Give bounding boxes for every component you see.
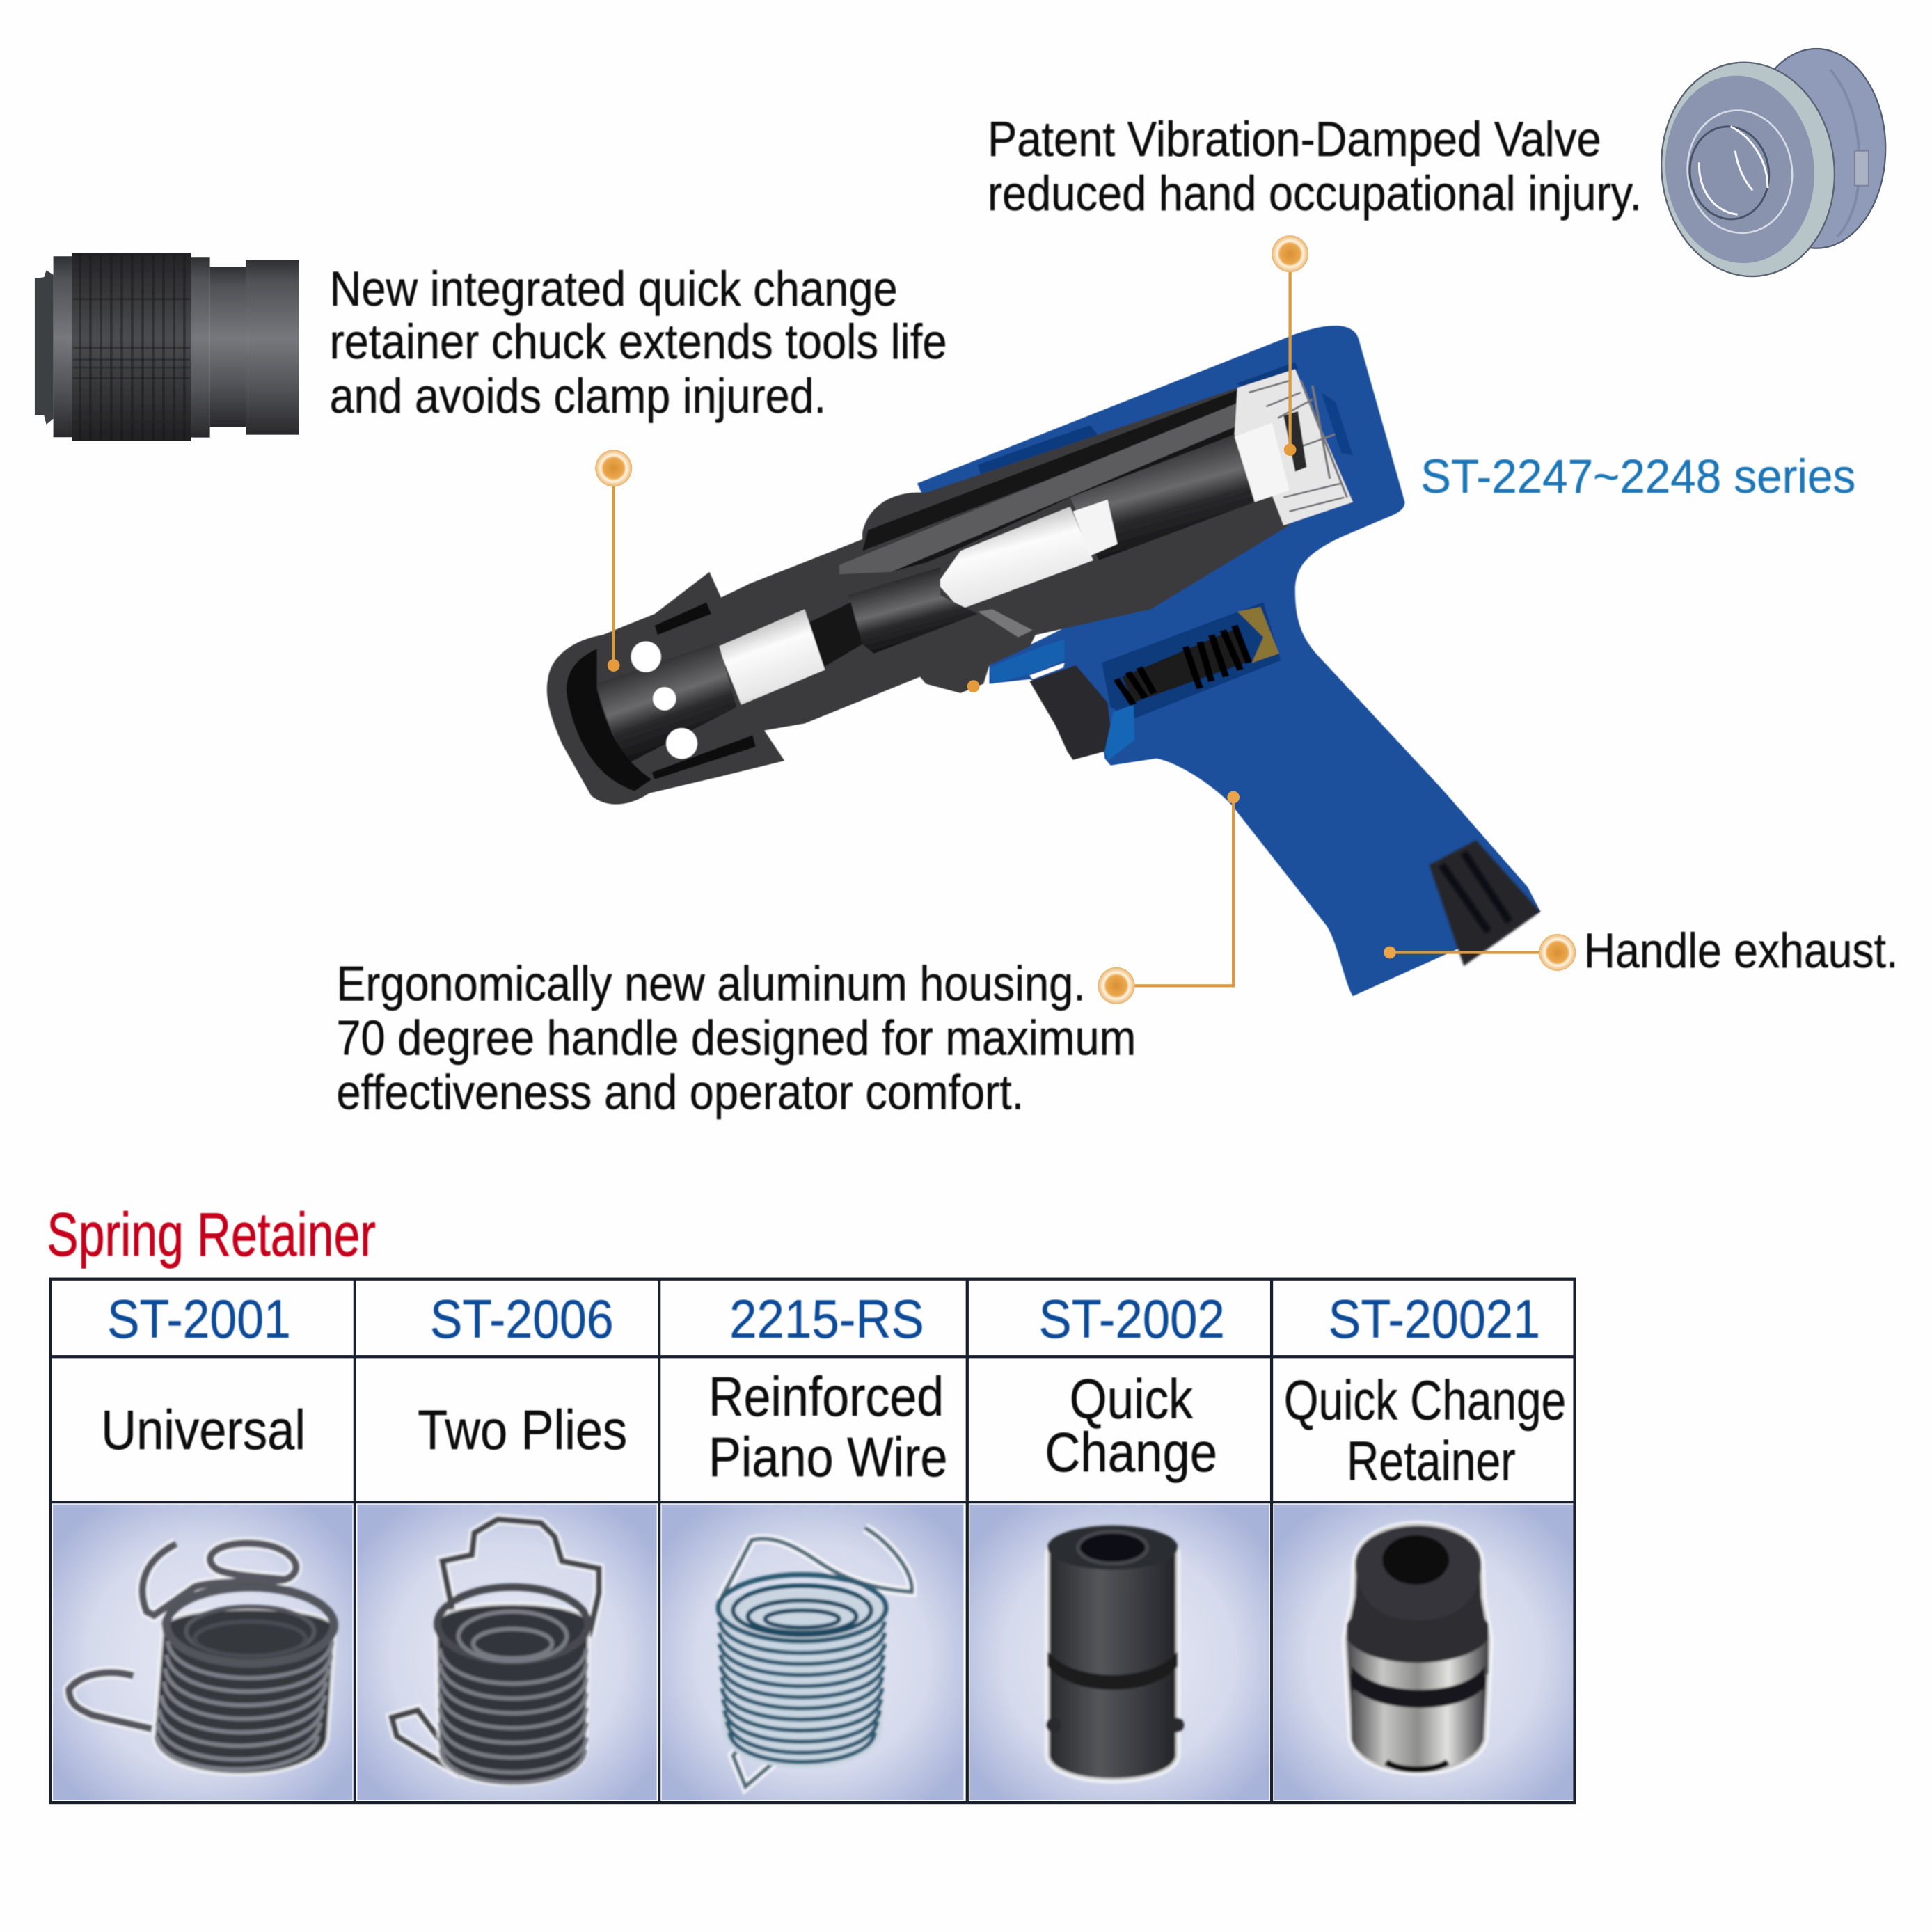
piston ring bbox=[1073, 500, 1118, 555]
rear valve assembly bbox=[1235, 369, 1353, 525]
illustration: cutaway air hammer bbox=[547, 326, 1540, 996]
piston rod bbox=[807, 602, 862, 667]
dark blue inner edge bbox=[1237, 362, 1298, 393]
valve details bbox=[1249, 381, 1347, 512]
blue end notch bbox=[1321, 393, 1353, 455]
exhaust port bbox=[1430, 840, 1540, 966]
callout: exhaust pointer bbox=[1384, 934, 1576, 971]
grey rail bbox=[839, 402, 1250, 574]
model numbers: ST-2002 bbox=[1038, 1288, 1225, 1349]
type descriptions: Quick Change bbox=[1284, 1370, 1566, 1432]
photo: ST-2006 spring bbox=[392, 1519, 599, 1784]
text: chuck description bbox=[330, 262, 947, 424]
mid barrel bbox=[848, 567, 978, 654]
valve bore bbox=[1102, 602, 1281, 719]
text: housing description: effectiveness and operator comfort. bbox=[336, 1065, 1024, 1120]
model numbers: ST-2001 bbox=[107, 1288, 291, 1349]
top rail bbox=[862, 390, 1243, 551]
photo: ST-2001 spring bbox=[69, 1543, 335, 1774]
type descriptions: Change bbox=[1045, 1421, 1217, 1483]
silver tool shank bbox=[718, 609, 825, 705]
text: housing description bbox=[336, 957, 1136, 1120]
table grid bbox=[51, 1279, 1575, 1803]
text: housing description: Ergonomically new aluminum housing. bbox=[336, 957, 1086, 1012]
table: spring retainer bbox=[51, 1279, 1575, 1803]
blue lower strip bbox=[990, 640, 1064, 684]
blue housing bbox=[917, 326, 1540, 996]
white piston bbox=[937, 507, 1093, 609]
type descriptions: Quick bbox=[1070, 1368, 1193, 1430]
rear cylinder bbox=[1070, 434, 1255, 560]
text: model series: ST-2247~2248 series bbox=[1420, 449, 1855, 503]
type descriptions: Two Plies bbox=[418, 1399, 627, 1461]
valve stem bbox=[1122, 628, 1252, 702]
type descriptions: Universal bbox=[101, 1399, 306, 1461]
photo: 2215-RS spring bbox=[717, 1528, 912, 1787]
model numbers bbox=[107, 1288, 1540, 1349]
angled bar bbox=[978, 609, 1033, 638]
type descriptions: Piano Wire bbox=[708, 1426, 947, 1488]
type descriptions: Retainer bbox=[1347, 1430, 1516, 1491]
text: chuck description: retainer chuck extends tools life bbox=[330, 315, 947, 370]
type descriptions: Reinforced bbox=[708, 1365, 944, 1427]
valve black centre bbox=[1283, 411, 1306, 472]
callout: housing pointer bbox=[1098, 791, 1240, 1004]
model numbers: ST-2006 bbox=[430, 1288, 614, 1349]
marker dot bbox=[967, 680, 979, 692]
text: chuck description: New integrated quick change bbox=[330, 262, 898, 317]
exhaust fins bbox=[1441, 853, 1510, 931]
text: chuck description: and avoids clamp injured. bbox=[330, 369, 826, 424]
text: valve description: Patent Vibration-Damped Valve bbox=[988, 112, 1601, 167]
dark housing patch bbox=[978, 425, 1099, 486]
white gap bbox=[1030, 663, 1064, 679]
photo: ST-20021 retainer bbox=[1345, 1523, 1491, 1773]
white valve sleeve bbox=[1235, 422, 1290, 502]
brass seat bbox=[1237, 607, 1279, 663]
upper slot bbox=[655, 602, 711, 635]
valve springs bbox=[1116, 626, 1249, 705]
photo: ST-2002 quick change bbox=[1046, 1526, 1184, 1781]
trigger bbox=[1030, 665, 1114, 760]
icon: vibration-damped valve bbox=[1651, 49, 1885, 285]
nose cap ring bbox=[567, 649, 651, 791]
text: valve description: reduced hand occupational injury. bbox=[988, 166, 1642, 221]
model numbers: 2215-RS bbox=[729, 1288, 924, 1349]
barrel housing bbox=[547, 388, 1290, 805]
black rail bbox=[892, 420, 1250, 572]
callout: valve pointer bbox=[1272, 235, 1308, 456]
trigger blue edge bbox=[1104, 705, 1134, 761]
front tube bbox=[597, 642, 736, 763]
image cell backgrounds bbox=[53, 1505, 1574, 1800]
text: handle exhaust: Handle exhaust. bbox=[1584, 924, 1898, 979]
model numbers: ST-20021 bbox=[1328, 1288, 1540, 1349]
icon: quick change chuck bbox=[35, 253, 299, 441]
type descriptions bbox=[101, 1365, 1566, 1491]
retainer holes bbox=[631, 642, 697, 759]
text: valve description bbox=[988, 112, 1642, 221]
lower slot bbox=[651, 735, 756, 779]
text: housing description: 70 degree handle designed for maximum bbox=[336, 1011, 1136, 1066]
heading: spring retainer: Spring Retainer bbox=[47, 1200, 376, 1269]
callout: chuck pointer bbox=[595, 450, 632, 672]
